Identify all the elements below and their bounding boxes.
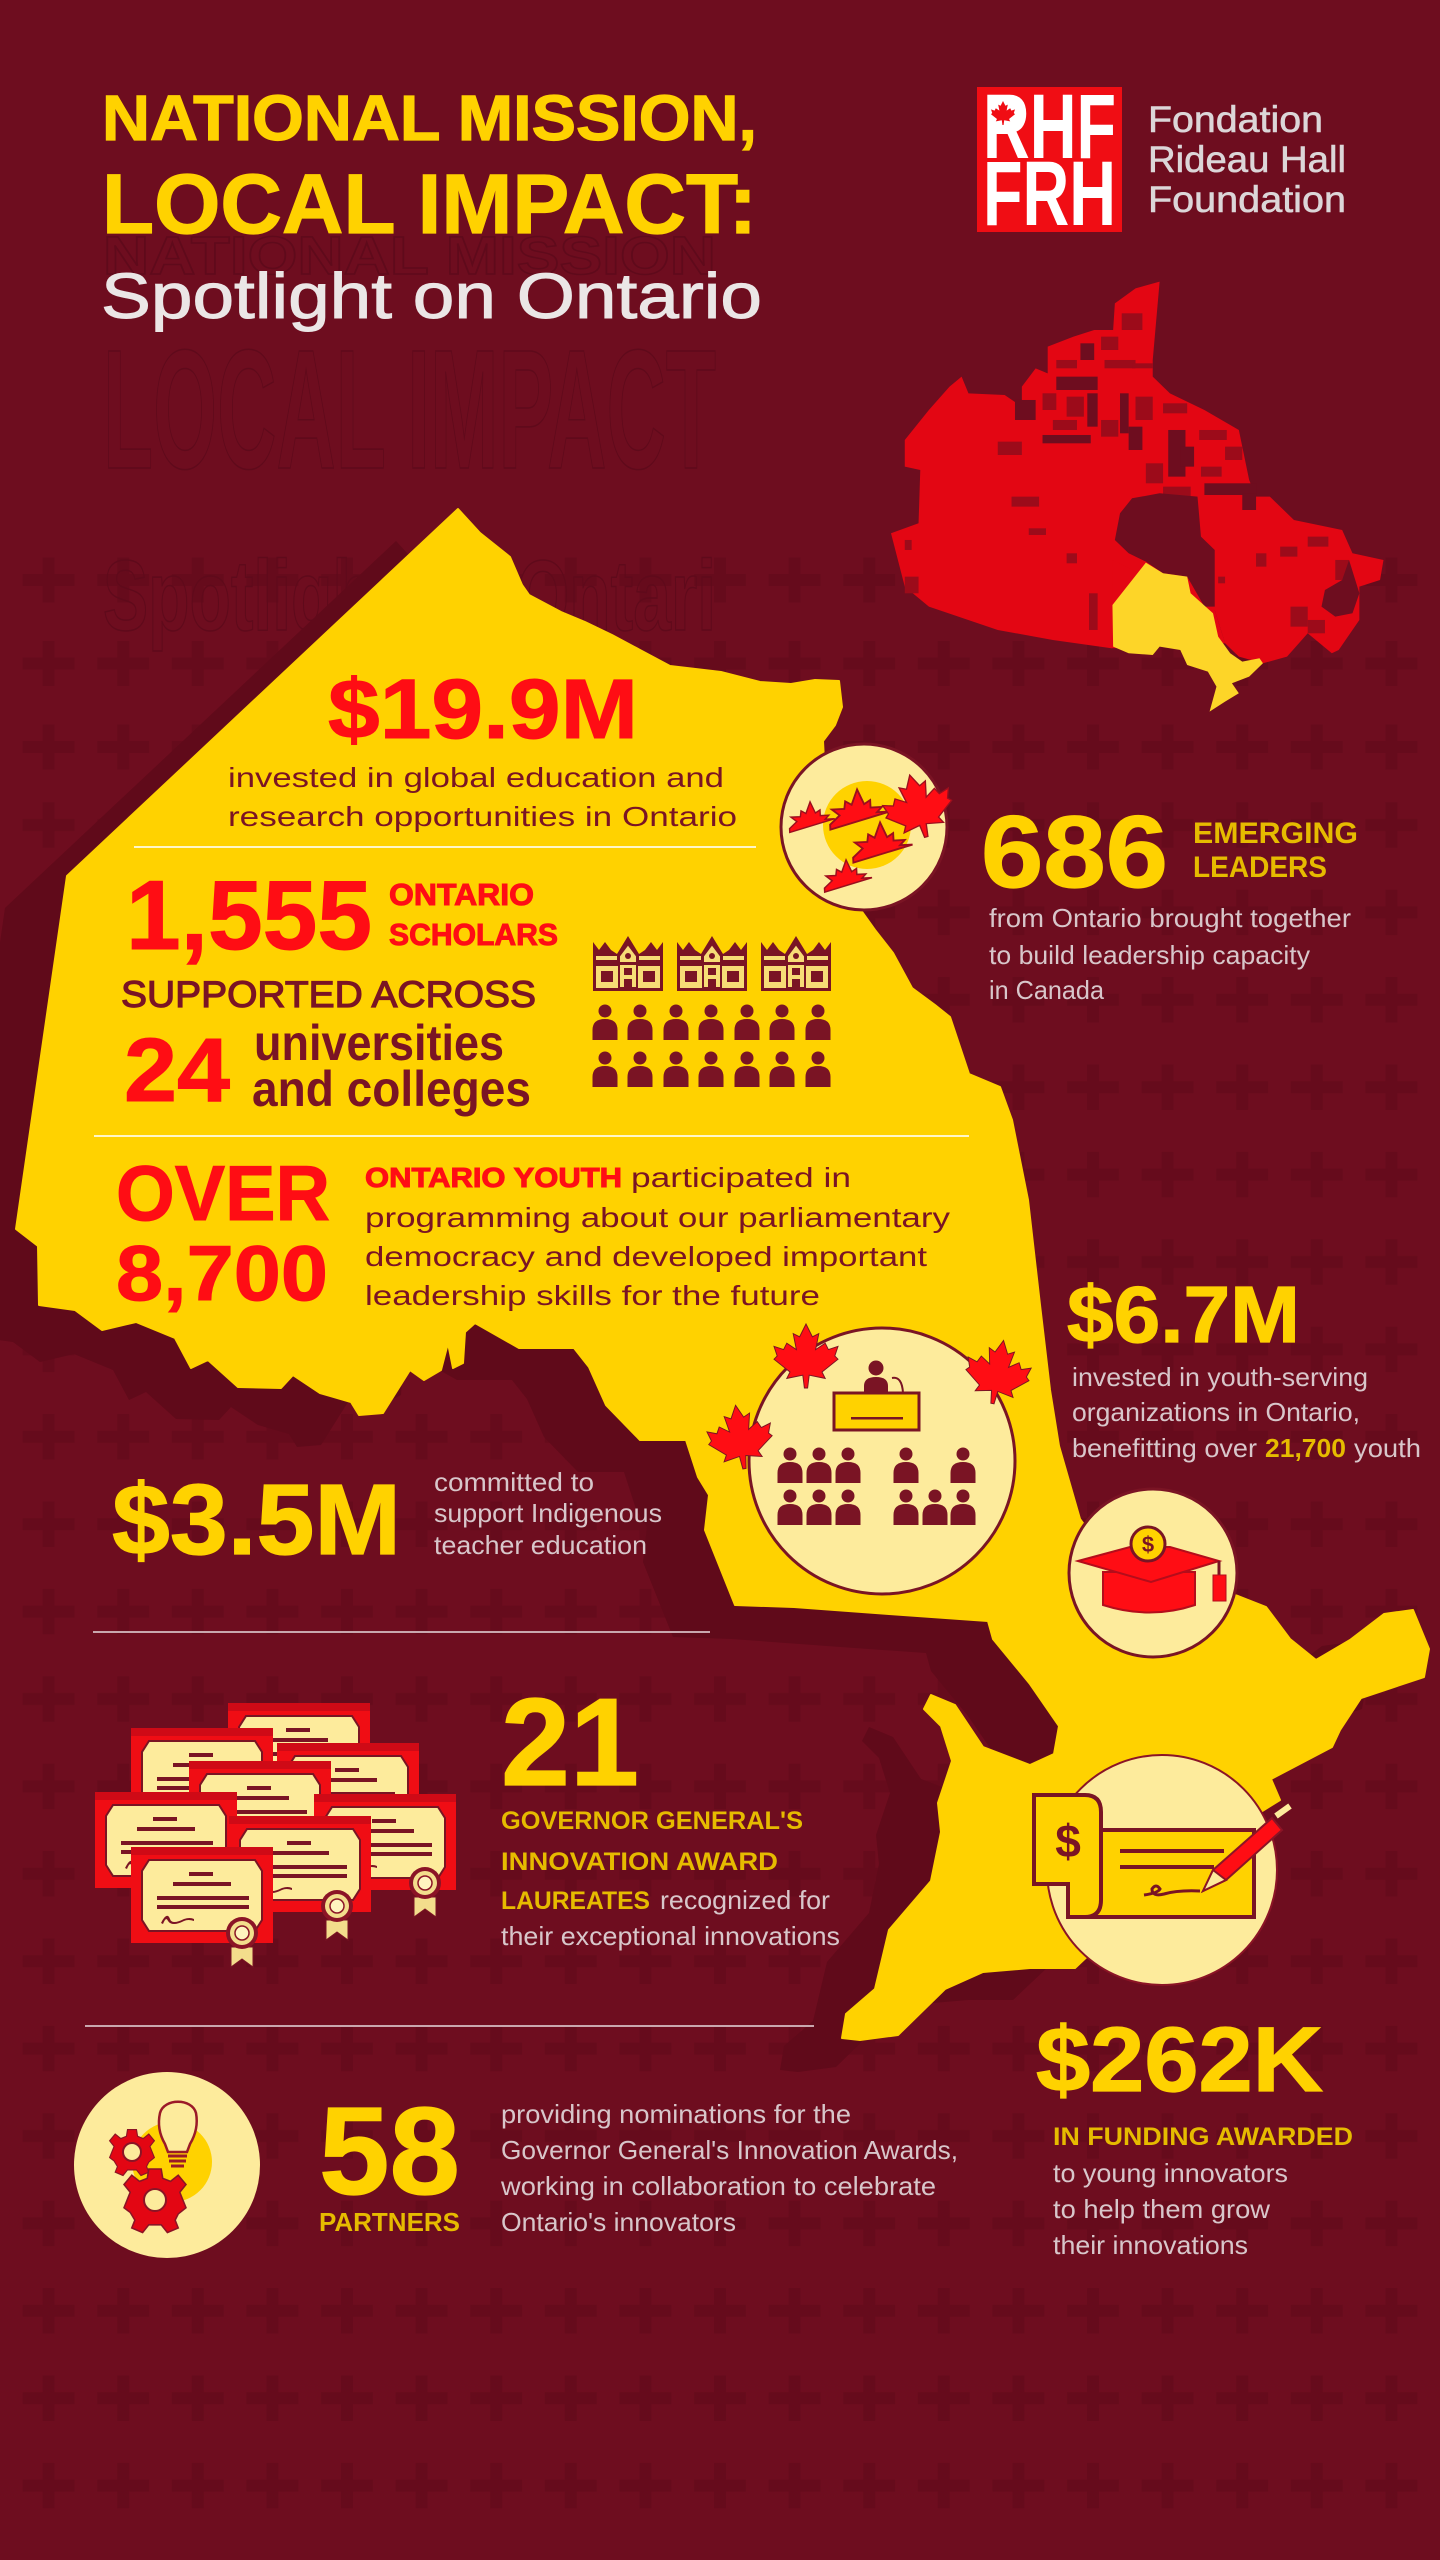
title: NATIONAL MISSION, <box>102 82 757 154</box>
icon: graduation cap with coin: $ <box>1142 1532 1154 1557</box>
stat: 21 Governor General's Innovation Award laureates <box>501 1674 840 1951</box>
stat: 1,555 Ontario scholars across 24 universities and colleges: ONTARIO <box>389 877 534 912</box>
stat: 1,555 Ontario scholars across 24 universities and colleges: 24 <box>124 1021 230 1121</box>
title: Spotlight on Ontario <box>101 260 762 332</box>
stat: 58 partners: providing nominations for the <box>501 2099 851 2129</box>
stat: 1,555 Ontario scholars across 24 universities and colleges <box>121 860 558 1121</box>
icon: signed cheque: $ <box>1055 1815 1081 1867</box>
map: Canada with Ontario highlighted <box>891 282 1383 712</box>
stat: 21 Governor General's Innovation Award laureates: GOVERNOR GENERAL'S <box>501 1807 803 1835</box>
icon: signed cheque <box>1034 1755 1290 1985</box>
stat: 1,555 Ontario scholars across 24 universities and colleges: SUPPORTED ACROSS <box>121 974 536 1015</box>
Ontario map shape <box>0 509 1429 2072</box>
logo: Rideau Hall Foundation: RHF <box>983 76 1116 178</box>
logo: Rideau Hall Foundation: FRH <box>983 143 1116 245</box>
stat: over 8,700 Ontario youth <box>116 1149 950 1317</box>
icon: youth programming assembly <box>704 1324 1035 1594</box>
stat: $6.7M youth-serving organizations: benefitting over <box>1072 1433 1257 1463</box>
stat: 686 emerging leaders: EMERGING <box>1193 817 1358 850</box>
stat: 58 partners: 58 <box>319 2083 460 2221</box>
stat: 1,555 Ontario scholars across 24 universities and colleges: and colleges <box>252 1061 531 1117</box>
stat: $262K in funding awarded: IN FUNDING AWARDED <box>1053 2123 1353 2151</box>
stat: over 8,700 Ontario youth: ONTARIO YOUTH <box>365 1162 622 1193</box>
icon: award certificates <box>95 1703 456 1967</box>
stat: over 8,700 Ontario youth: OVER <box>116 1149 330 1237</box>
icon: scholars <box>592 1004 830 1087</box>
stat: 686 emerging leaders: 686 <box>981 795 1168 909</box>
stat: $6.7M youth-serving organizations: organizations in Ontario, <box>1072 1397 1360 1427</box>
stat: 21 Governor General's Innovation Award laureates: recognized for <box>660 1885 830 1915</box>
logo: Rideau Hall Foundation: Foundation <box>1148 179 1346 220</box>
stat: 58 partners: working in collaboration to celebrate <box>500 2171 936 2201</box>
stat: over 8,700 Ontario youth: participated in <box>631 1162 851 1193</box>
stat: $262K in funding awarded: to help them grow <box>1053 2194 1270 2224</box>
stat: 1,555 Ontario scholars across 24 universities and colleges: universities <box>254 1015 504 1071</box>
text: Spotlight on Ontari <box>103 540 716 652</box>
stat: over 8,700 Ontario youth: leadership skills for the future <box>365 1280 820 1311</box>
stat: $19.9M invested: invested in global education and <box>228 762 724 793</box>
stat: $6.7M youth-serving organizations: 21,700 <box>1265 1433 1346 1463</box>
stat: $3.5M Indigenous teacher education <box>112 1464 662 1576</box>
stat: 58 partners: Governor General's Innovation Awards, <box>501 2135 958 2165</box>
stat: 58 partners <box>319 2083 958 2237</box>
stat: 686 emerging leaders <box>981 795 1358 1005</box>
stat: $262K in funding awarded: $262K <box>1036 2009 1323 2111</box>
stat: 58 partners: Ontario's innovators <box>501 2207 736 2237</box>
logo: Rideau Hall Foundation <box>977 76 1346 245</box>
icon: university buildings <box>593 936 831 991</box>
logo: Rideau Hall Foundation: Fondation <box>1148 99 1323 140</box>
stat: 686 emerging leaders: from Ontario brought together <box>989 903 1351 933</box>
stat: 686 emerging leaders: to build leadership capacity <box>989 940 1310 970</box>
stat: 21 Governor General's Innovation Award laureates: 21 <box>501 1674 639 1812</box>
stat: 1,555 Ontario scholars across 24 universities and colleges: SCHOLARS <box>389 917 558 952</box>
stat: $19.9M invested: research opportunities in Ontario <box>228 801 737 832</box>
logo: Rideau Hall Foundation: Rideau Hall <box>1148 139 1346 180</box>
stat: over 8,700 Ontario youth: 8,700 <box>116 1229 328 1317</box>
stat: over 8,700 Ontario youth: democracy and developed important <box>365 1241 927 1272</box>
stat: 21 Governor General's Innovation Award laureates: their exceptional innovations <box>501 1921 840 1951</box>
stat: $6.7M youth-serving organizations <box>1067 1270 1421 1463</box>
text: NATIONAL MISSION <box>103 226 716 286</box>
icon: light bulb and gears <box>74 2072 260 2258</box>
stat: 21 Governor General's Innovation Award laureates: LAUREATES <box>501 1887 650 1915</box>
stat: $3.5M Indigenous teacher education: teacher education <box>434 1530 647 1560</box>
stat: 21 Governor General's Innovation Award laureates: INNOVATION AWARD <box>501 1848 778 1876</box>
icon: maple leaves circle <box>781 744 959 910</box>
stat: $3.5M Indigenous teacher education: committed to <box>434 1467 594 1497</box>
stat: $6.7M youth-serving organizations: youth <box>1354 1433 1421 1463</box>
stat: 686 emerging leaders: LEADERS <box>1193 851 1327 884</box>
stat: 58 partners: PARTNERS <box>319 2207 460 2237</box>
stat: 686 emerging leaders: in Canada <box>989 975 1105 1005</box>
stat: over 8,700 Ontario youth: programming about our parliamentary <box>365 1202 950 1233</box>
stat: $262K in funding awarded: to young innovators <box>1053 2158 1288 2188</box>
stat: $262K in funding awarded: their innovations <box>1053 2230 1248 2260</box>
stat: $3.5M Indigenous teacher education: support Indigenous <box>434 1498 662 1528</box>
title: LOCAL IMPACT: <box>102 157 757 251</box>
stat: $3.5M Indigenous teacher education: $3.5M <box>112 1464 401 1576</box>
icon: graduation cap with coin <box>1069 1489 1237 1657</box>
text: LOCAL IMPACT <box>103 315 716 505</box>
stat: $6.7M youth-serving organizations: invested in youth-serving <box>1072 1362 1368 1392</box>
stat: 1,555 Ontario scholars across 24 universities and colleges: 1,555 <box>126 860 372 970</box>
stat: $19.9M invested: $19.9M <box>328 662 638 756</box>
stat: $262K in funding awarded <box>1036 2009 1353 2260</box>
title <box>101 82 762 332</box>
stat: $19.9M invested <box>228 662 737 832</box>
stat: $6.7M youth-serving organizations: $6.7M <box>1067 1270 1300 1359</box>
